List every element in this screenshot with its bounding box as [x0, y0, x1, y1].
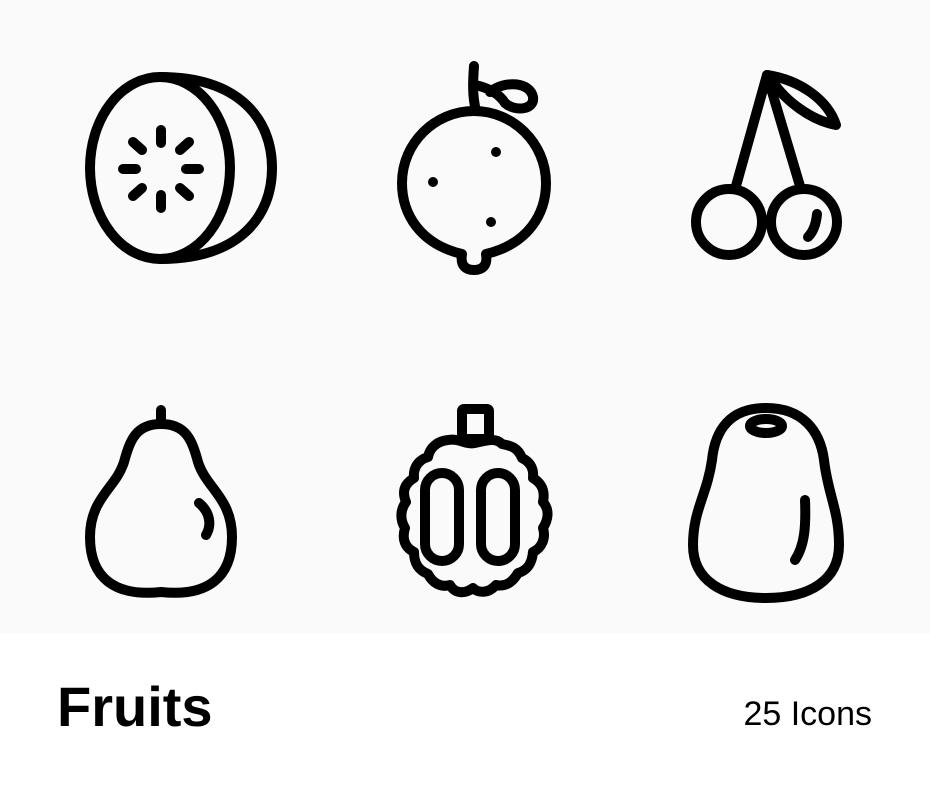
icon: pear — [90, 410, 232, 593]
title: Fruits — [57, 675, 213, 738]
icon count: 25 Icons — [743, 695, 872, 733]
icon: mango — [693, 408, 839, 598]
icon: durian — [401, 409, 548, 592]
icon: kiwi — [90, 77, 272, 259]
icon: orange — [402, 66, 546, 270]
icon: cherry — [696, 75, 837, 255]
